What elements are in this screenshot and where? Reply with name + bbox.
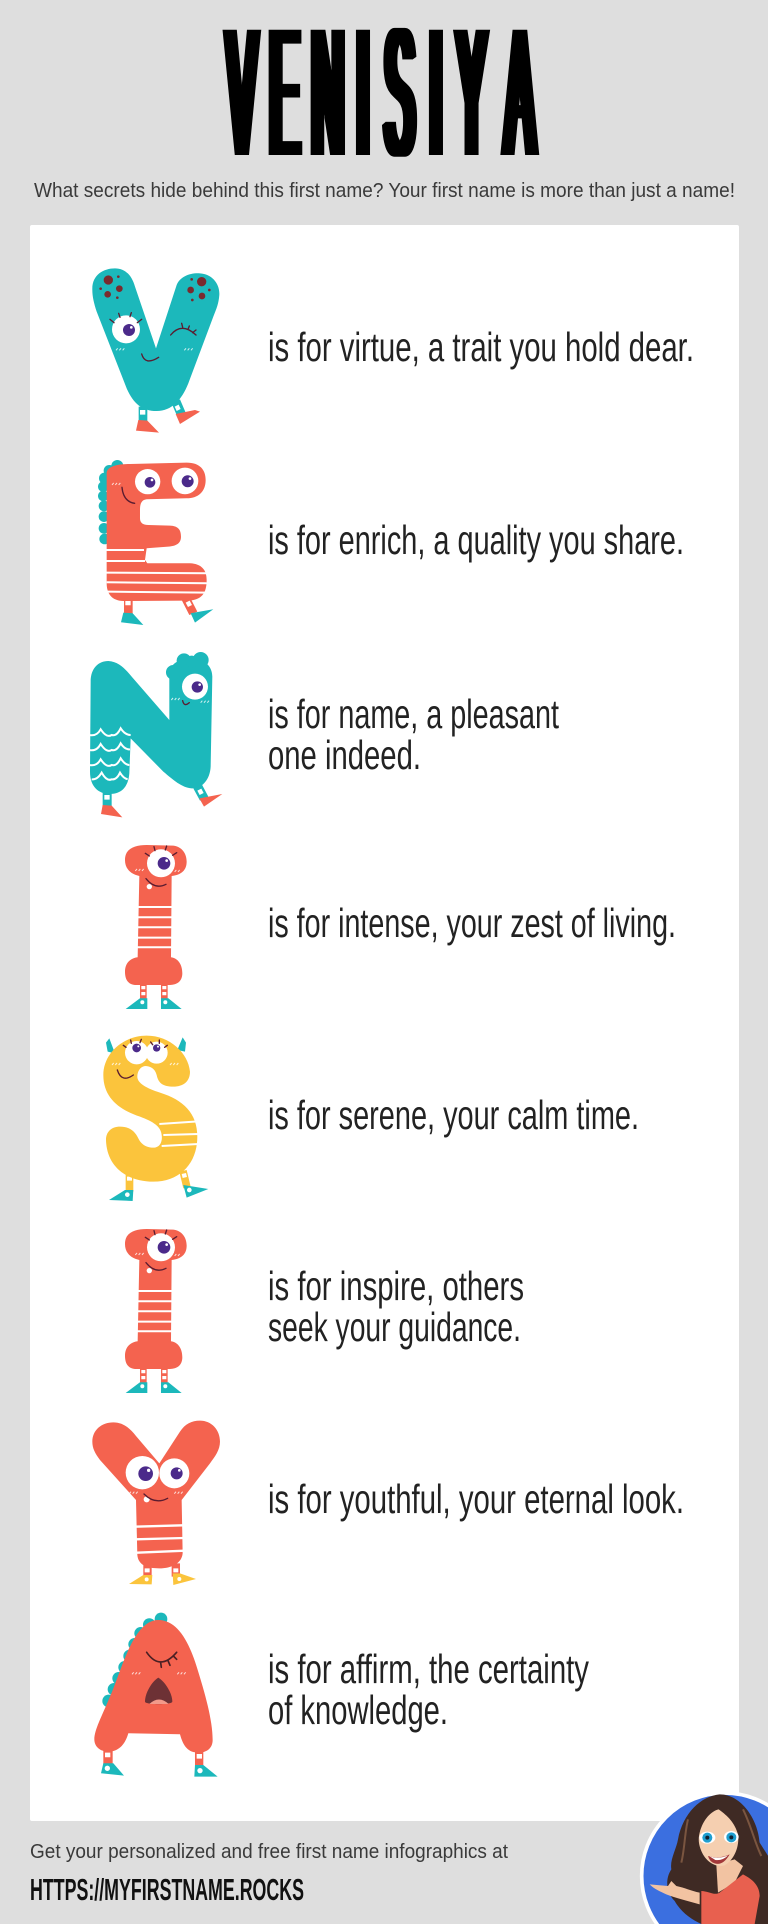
icon: letter A xyxy=(94,1613,218,1777)
footer url: HTTPS://MYFIRSTNAME.ROCKS xyxy=(30,1872,304,1907)
text: N line: is for name, a pleasant xyxy=(268,691,559,737)
icon: letter E xyxy=(98,460,213,625)
subtitle: What secrets hide behind this first name? Your first name is more than just a name! xyxy=(34,179,735,202)
text: A line: is for affirm, the certainty xyxy=(268,1646,589,1692)
text: A line xyxy=(268,1646,589,1733)
text: N line xyxy=(268,691,559,778)
icon: letter I xyxy=(125,845,187,1009)
avatar xyxy=(642,1793,768,1924)
text: N line: one indeed. xyxy=(268,732,421,778)
text: I second line: is for inspire, others xyxy=(268,1263,524,1309)
panel: letters xyxy=(30,225,739,1821)
text: I second line: seek your guidance. xyxy=(268,1304,521,1350)
icon: letter N xyxy=(89,652,222,817)
icon: letter I second xyxy=(125,1229,187,1393)
icon: letter V xyxy=(92,268,219,433)
text: I second line xyxy=(268,1263,524,1350)
footer text: Get your personalized and free first name infographics at xyxy=(30,1841,508,1863)
icon: letter Y xyxy=(92,1421,220,1585)
text: A line: of knowledge. xyxy=(268,1687,448,1733)
icon: letter S xyxy=(103,1036,208,1201)
